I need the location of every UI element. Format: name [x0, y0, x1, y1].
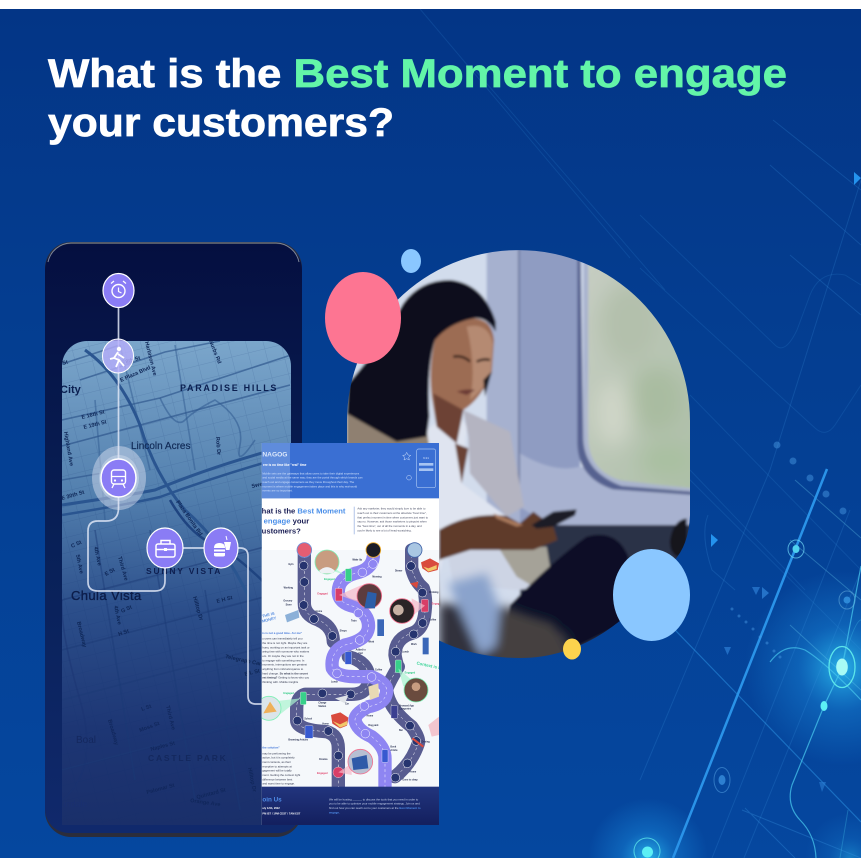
poster infographic: [257, 442, 446, 825]
map: Orange Ave: [190, 798, 221, 808]
poster left column text: thinking with. Mobile insights: [262, 680, 299, 684]
poster footer: engage.: [329, 810, 340, 814]
road labels: Bar: [399, 730, 403, 732]
road labels: Wake Up: [352, 559, 363, 561]
engaged phone markers: [300, 569, 428, 778]
map: Quintard St: [196, 787, 227, 801]
map: E 16th St: [81, 409, 105, 421]
poster footer: [262, 787, 439, 825]
road labels: Dinner: [395, 570, 402, 572]
map place names: [62, 384, 276, 761]
map: G St: [120, 605, 133, 615]
poster left column text: ext timing? Getting to know who you: [262, 676, 310, 680]
engaged labels: [283, 578, 443, 775]
road labels: Driving: [422, 742, 430, 744]
title: [48, 52, 787, 145]
window pillar: [484, 250, 690, 527]
poster left column text: y users can immediately tell you: [262, 637, 303, 641]
map: Rob Dr: [214, 437, 221, 456]
road labels: Shops: [340, 631, 347, 633]
map: Harbison Ave: [143, 341, 157, 376]
right dark road: [387, 550, 426, 777]
poster intro text: reach out to their customers at the absolute "best time",: [357, 511, 427, 515]
engaged labels: Engaged: [317, 592, 328, 595]
poster left column text: the time is not right. Maybe they are: [262, 641, 308, 645]
circuit line pattern: [420, 9, 861, 858]
poster footer: you to be able to optimize your mobile engagement strategy. Join us and: [329, 802, 420, 806]
tilted callouts: [261, 611, 446, 672]
poster left column text: ment. Getting the context right: [262, 773, 300, 777]
map: [52, 340, 291, 825]
road labels: Train: [351, 620, 357, 622]
poster footer: uly 12th, 2022: [262, 806, 280, 810]
road labels: Dog park: [368, 725, 379, 727]
icon node: alarm clock: [103, 274, 134, 308]
poster footer: We will be hosting ______ to discuss the tools that you need in order to: [329, 797, 419, 801]
road labels: Working: [284, 587, 294, 589]
road labels: Browsed App: [399, 704, 414, 707]
map: Broadway: [75, 621, 87, 649]
map place names: City: [60, 384, 82, 396]
map: Hilltop Dr: [191, 596, 204, 622]
map place names: Boal: [76, 735, 96, 746]
road labels: Home: [316, 611, 323, 613]
dots and rings of the circuit pattern: [634, 442, 855, 858]
map: E 30th St: [61, 490, 85, 502]
title: your customers?: [48, 101, 394, 145]
journey connector lines: [88, 291, 265, 704]
poster footer: find out how you can reach out to your customers at the Best Moment to: [329, 806, 421, 810]
icon node: burger and drink: [204, 528, 238, 568]
triangle markers: [711, 172, 861, 792]
poster header: NAGOG: [262, 452, 287, 459]
road labels: Goes to sleep: [402, 778, 418, 781]
road labels: Lunch: [331, 681, 339, 683]
road labels: Drinking: [429, 592, 439, 594]
road labels: Article: [390, 749, 398, 752]
poster intro text: say no. However, ask those marketers to pinpoint when: [357, 520, 427, 524]
road labels: Home: [410, 771, 417, 773]
map: Naples St: [150, 741, 176, 753]
engaged labels: Engaged: [283, 692, 294, 695]
poster left column text: and worst time to engage.: [262, 782, 295, 786]
poster intro text: [354, 507, 428, 534]
map place names: Chula Vista: [71, 588, 142, 603]
poster intro text: you're likely to see a lot of head-scratching.: [357, 528, 412, 532]
poster intro text: the "best time", out of all the moments in a day, and: [357, 524, 422, 528]
road labels: Added to: [356, 649, 366, 652]
engaged labels: Engaged: [432, 602, 443, 605]
tilted callouts: THE IS: [261, 611, 275, 619]
poster left column text: may be performing the: [262, 751, 291, 755]
road labels: Store: [286, 603, 292, 606]
map: St: [62, 359, 69, 367]
icon node: walking person: [102, 339, 134, 373]
engaged labels: Engaged: [405, 672, 416, 675]
poster header: events are so important.: [262, 489, 293, 493]
map: E H St: [216, 595, 233, 605]
poster footer: oin Us: [262, 797, 282, 804]
poster left column text: difference between best: [262, 777, 293, 781]
poster header: 9:21: [423, 456, 429, 460]
map: E 19th St: [83, 419, 107, 431]
title: What is the Best Moment to engage: [48, 52, 787, 96]
map: Moss St: [139, 721, 161, 734]
map place names: Frundale: [52, 799, 88, 809]
icon node: briefcase: [147, 528, 183, 568]
road labels: Work: [368, 641, 375, 643]
yellow circle: [563, 638, 581, 660]
phone with map: [45, 242, 302, 837]
map: E 8th St: [120, 355, 141, 367]
poster left column text: anything from mild annoyance to: [262, 667, 304, 671]
road labels: Lunch: [402, 652, 410, 654]
road labels: Home: [367, 716, 374, 718]
woman: [347, 280, 628, 652]
map: C St: [70, 540, 83, 550]
map place names: CASTLE PARK: [148, 753, 228, 763]
road labels: [283, 559, 439, 781]
road labels: Categories: [399, 708, 412, 711]
purple road: [332, 557, 387, 788]
map: Sweetwater: [251, 477, 283, 490]
poster left column text: action, but it is completely: [262, 756, 295, 760]
poster left column text: hard change. So what is the secret: [262, 671, 308, 675]
poster heading: hat is the Best Moment: [262, 506, 346, 515]
map: L St: [141, 704, 153, 713]
road labels: School: [304, 718, 312, 720]
poster left column text: receptive to attempts at: [262, 764, 292, 768]
poster intro text: Ask any marketer, they would simply love to be able to: [357, 507, 426, 511]
left dark road: [304, 550, 333, 642]
lower seat area: [518, 522, 690, 646]
poster header: and social media at the same way; they are the portal through which brands can: [262, 476, 363, 480]
poster header: Mobile sets are the gateways that allow users to take their digital experiences: [262, 471, 360, 475]
people portraits: [257, 543, 428, 774]
poster heading: engage your: [264, 516, 309, 525]
map: 5th Ave: [74, 554, 84, 574]
poster left column text: gagement will be totally: [262, 769, 292, 773]
map: Nurbs Rd: [207, 340, 222, 365]
road map area: [257, 543, 446, 825]
tilted callouts: MONEY: [261, 615, 277, 624]
road labels: Book: [390, 747, 397, 749]
map: 4th Ave: [112, 605, 122, 625]
road labels: Car: [345, 703, 349, 705]
map: Palomar St: [146, 783, 175, 796]
road labels: Coffee: [375, 670, 383, 672]
map: E Plaza Blvd: [119, 365, 152, 384]
map: H St: [118, 628, 130, 638]
map: Plaza Bonita Rd: [174, 500, 203, 537]
road labels: Charge: [318, 702, 327, 704]
poster left column text: hurry, working on an important task or: [262, 645, 310, 649]
pink circle: [325, 272, 401, 364]
map place names: Lincoln Acres: [131, 441, 190, 452]
poster header: ere is no time like "real" time: [263, 463, 307, 467]
poster left column text: moments, interruptions are greatest: [262, 663, 307, 667]
poster left column text: [262, 631, 310, 786]
poster footer: PM IST / 1PM CEST / 7AM EST: [262, 812, 301, 816]
road labels: Cart: [358, 652, 363, 655]
road labels: Station: [318, 705, 327, 708]
road labels: Grocery: [283, 601, 293, 603]
road labels: Morning: [372, 577, 382, 579]
lower dark road: [297, 657, 369, 788]
poster header: moment is where mobile engagement takes place and this is why real-world: [262, 484, 358, 488]
poster intro text: that perfect moment in time when customers just want to: [357, 515, 428, 519]
map place names: PARADISE HILLS: [180, 383, 278, 393]
window: [577, 257, 693, 495]
engaged beams: [272, 563, 425, 775]
map: E L St: [244, 668, 261, 678]
poster left column text: em. Or maybe they are not in the: [262, 654, 304, 658]
map: Hilltop Dr: [246, 767, 257, 793]
map: Third Ave: [164, 705, 176, 731]
map: 4th Ave: [92, 546, 102, 566]
poster heading: ustomers?: [262, 526, 301, 535]
tilted callouts: Context is key: [416, 660, 446, 672]
engaged labels: Engaged: [317, 772, 328, 775]
map: E St: [104, 567, 116, 578]
road stops: [293, 561, 427, 782]
engaged labels: Engaged: [324, 578, 335, 581]
map: Highland Ave: [62, 431, 74, 467]
map place names: SUNNY VISTA: [146, 566, 222, 576]
road labels: Cinema: [319, 759, 328, 761]
map: Telegraph Can: [225, 654, 263, 668]
icon node: bus with halo: [92, 446, 146, 510]
poster left column text: aring time with someone who matters: [262, 650, 310, 654]
poster heading: [262, 508, 346, 534]
map: Third Ave: [116, 556, 129, 582]
road labels: Browsing Articles: [288, 739, 309, 742]
road labels: Home: [322, 723, 330, 725]
large blue circle: [613, 549, 690, 641]
poster left column text: is is not a good time...for me": [262, 631, 303, 635]
poster header: reach out and engage consumers as they move throughout their day. The: [262, 480, 355, 484]
poster header: [262, 442, 439, 498]
road labels: Coffee: [429, 619, 437, 621]
small blue circle: [401, 249, 421, 273]
photo of woman on train: [347, 250, 690, 658]
road labels: Gym: [288, 564, 294, 566]
road labels: Work: [411, 644, 417, 646]
illustrations: [285, 558, 439, 747]
poster left column text: ment contexts, as their: [262, 760, 291, 764]
poster left column text: the solution": [262, 746, 280, 750]
poster left column text: to engage with something new. In: [262, 658, 305, 662]
blurred foreground hand and phone: [439, 570, 576, 658]
map: Broadway: [106, 719, 119, 747]
